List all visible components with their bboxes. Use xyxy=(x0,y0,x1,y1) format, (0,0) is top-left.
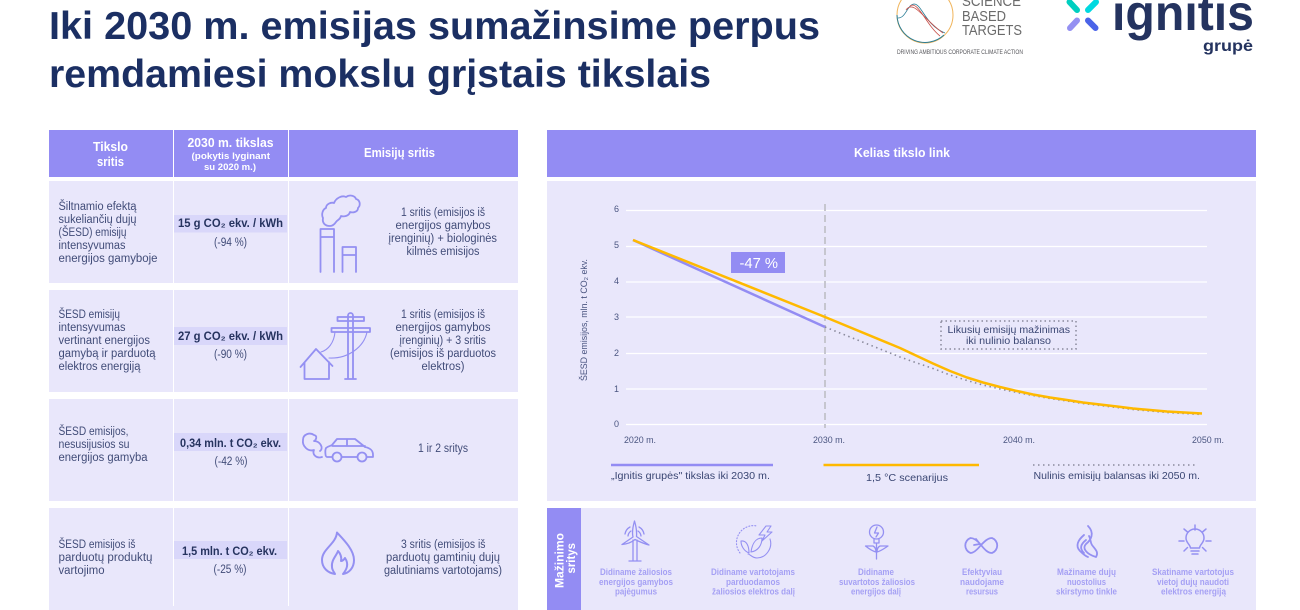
title xyxy=(49,5,820,96)
y axis labels xyxy=(614,204,619,429)
icon: gas flame xyxy=(322,532,354,574)
callout: residual emissions xyxy=(941,321,1076,349)
item: leaf and lightning: žaliosios elektros dalį xyxy=(712,586,795,596)
row 2: sold electricity intensity: energijos gamybos xyxy=(396,322,491,334)
tab: reduction areas heading: Mažinimo xyxy=(552,533,566,588)
callout: -47 percent xyxy=(731,252,785,273)
icon: car with exhaust xyxy=(303,434,373,462)
x axis labels: 2040 m. xyxy=(1003,435,1035,445)
y axis labels: 1 xyxy=(614,384,619,394)
row 1: energy generation intensity: kilmės emisijos xyxy=(406,246,480,258)
legend: „Ignitis grupės" tikslas iki 2030 m. xyxy=(611,470,770,482)
item: gas wave xyxy=(1056,526,1117,596)
logo: science based targets: TARGETS xyxy=(962,23,1022,39)
logo: ignitis grupe: grupė xyxy=(1203,38,1253,55)
logo: science based targets: BASED xyxy=(962,9,1006,25)
row 1: energy generation intensity: 15 g CO₂ ekv. / kWh xyxy=(178,218,283,230)
row 1: energy generation intensity: įrenginių) + biologinės xyxy=(388,233,497,245)
table header: su 2020 m.) xyxy=(204,162,256,173)
logo: science based targets xyxy=(897,0,1023,56)
row 2: sold electricity intensity: ŠESD emisijų xyxy=(58,308,120,321)
panel header: path to target: Kelias tikslo link xyxy=(854,146,950,160)
item: leaf and lightning xyxy=(711,526,795,596)
icon: factory chimneys xyxy=(320,196,360,272)
row 4: sold products use: vartojimo xyxy=(58,565,104,577)
item: light bulb: Skatiname vartotojus xyxy=(1152,567,1234,577)
row 4: sold products use: (-25 %) xyxy=(214,564,247,576)
tab: reduction areas heading: sritys xyxy=(564,543,578,574)
row 4: sold products use: ŠESD emisijos iš xyxy=(58,538,136,551)
item: infinity loop xyxy=(960,538,1004,596)
line: 1.5C scenario xyxy=(633,240,1202,414)
row 3: non-generation emissions: 0,34 mln. t CO₂ ekv. xyxy=(180,438,281,450)
y axis labels: 4 xyxy=(614,276,619,286)
row 1: energy generation intensity: Šiltnamio efektą xyxy=(58,200,137,213)
y axis labels: 6 xyxy=(614,204,619,214)
row 1: energy generation intensity xyxy=(49,181,518,283)
row 4: sold products use: 1,5 mln. t CO₂ ekv. xyxy=(182,546,277,558)
item: light bulb: elektros energiją xyxy=(1161,586,1226,596)
table header: (pokytis lyginant xyxy=(192,151,271,162)
item: bulb plant xyxy=(839,525,915,596)
item: infinity loop: resursus xyxy=(966,586,998,596)
item: gas wave: skirstymo tinkle xyxy=(1056,586,1117,596)
callout: residual emissions: Likusių emisijų mažinimas xyxy=(948,324,1070,336)
table header xyxy=(49,130,518,177)
item: wind turbine: energijos gamybos xyxy=(599,577,673,587)
row 3: non-generation emissions: (-42 %) xyxy=(214,456,248,468)
item: light bulb: vietoj dujų naudoti xyxy=(1157,577,1229,587)
2030 marker xyxy=(824,204,826,428)
y axis title: ŠESD emisijos, mln. t CO₂ ekv. xyxy=(579,259,589,381)
row 4: sold products use: galutiniams vartotojams) xyxy=(384,565,502,577)
y axis labels: 2 xyxy=(614,348,619,358)
y axis labels: 0 xyxy=(614,419,619,429)
item: leaf and lightning: Didiname vartotojams xyxy=(711,567,795,577)
row 3: non-generation emissions xyxy=(49,399,518,501)
row 2: sold electricity intensity: elektros energiją xyxy=(58,361,141,373)
item: wind turbine: pajėgumus xyxy=(615,586,657,596)
item: leaf and lightning: parduodamos xyxy=(726,577,780,587)
item: infinity loop: Efektyviau xyxy=(962,567,1002,577)
item: bulb plant: suvartotos žaliosios xyxy=(839,577,915,587)
item: bulb plant: Didiname xyxy=(858,567,894,577)
row 4: sold products use: parduotų produktų xyxy=(58,552,152,564)
row 1: energy generation intensity: energijos gamyboje xyxy=(58,253,158,265)
logo: ignitis grupe xyxy=(1070,0,1254,55)
item: wind turbine xyxy=(599,521,673,596)
row 2: sold electricity intensity: vertinant energijos xyxy=(58,335,150,347)
tab: reduction areas heading xyxy=(547,508,581,610)
table header: Tikslo xyxy=(93,140,128,154)
row 2: sold electricity intensity xyxy=(49,290,518,392)
row 1: energy generation intensity: sukeliančių dujų xyxy=(58,214,136,226)
row 3: non-generation emissions: energijos gamyba xyxy=(58,452,148,464)
icon: house and power pole xyxy=(300,313,370,379)
table header: 2030 m. tikslas xyxy=(188,136,274,150)
row 2: sold electricity intensity: gamybą ir parduotą xyxy=(58,348,156,360)
panel: emissions line chart xyxy=(547,181,1256,501)
row 1: energy generation intensity: (ŠESD) emisijų xyxy=(58,226,126,239)
row 2: sold electricity intensity: elektros) xyxy=(422,361,465,373)
row 1: energy generation intensity: (-94 %) xyxy=(214,237,247,249)
logo: science based targets: DRIVING AMBITIOUS CORPORATE CLIMATE ACTION xyxy=(897,49,1023,56)
x axis labels xyxy=(624,435,1224,445)
item: infinity loop: naudojame xyxy=(960,577,1004,587)
panel: reduction areas xyxy=(547,508,1256,610)
title: remdamiesi mokslu grįstais tikslais xyxy=(49,53,711,96)
x axis labels: 2020 m. xyxy=(624,435,656,445)
table header: Emisijų sritis xyxy=(364,146,435,160)
x axis labels: 2050 m. xyxy=(1192,435,1224,445)
row 3: non-generation emissions: nesusijusios su xyxy=(58,439,130,451)
row 4: sold products use xyxy=(49,508,518,610)
legend xyxy=(611,465,1200,484)
panel: target table xyxy=(49,130,518,610)
callout: -47 percent: -47 % xyxy=(740,255,778,272)
item: light bulb xyxy=(1152,525,1234,596)
row 1: energy generation intensity: 1 sritis (emisijos iš xyxy=(401,207,485,219)
legend: Nulinis emisijų balansas iki 2050 m. xyxy=(1034,470,1200,482)
line: net zero dotted xyxy=(825,327,1202,414)
row 3: non-generation emissions: 1 ir 2 sritys xyxy=(418,443,468,455)
legend: 1,5 °C scenarijus xyxy=(866,472,948,484)
row 4: sold products use: parduotų gamtinių dujų xyxy=(386,552,500,564)
row 4: sold products use: 3 sritis (emisijos iš xyxy=(401,539,486,551)
item: wind turbine: Didiname žaliosios xyxy=(600,567,672,577)
row 2: sold electricity intensity: (emisijos iš parduotos xyxy=(390,348,496,360)
row 2: sold electricity intensity: 1 sritis (emisijos iš xyxy=(401,309,485,321)
row 2: sold electricity intensity: (-90 %) xyxy=(214,349,247,361)
row 1: energy generation intensity: intensyvumas xyxy=(58,240,126,252)
line: ignitis target xyxy=(633,240,825,327)
y axis labels: 5 xyxy=(614,240,619,250)
y axis labels: 3 xyxy=(614,312,619,322)
table header: sritis xyxy=(97,155,124,169)
x axis labels: 2030 m. xyxy=(813,435,845,445)
row 1: energy generation intensity: energijos gamybos xyxy=(396,220,491,232)
item: gas wave: Mažiname dujų xyxy=(1057,567,1116,577)
item: gas wave: nuostolius xyxy=(1067,577,1106,587)
row 3: non-generation emissions: ŠESD emisijos, xyxy=(58,425,128,438)
callout: residual emissions: iki nulinio balanso xyxy=(966,335,1051,347)
panel header: path to target xyxy=(547,130,1256,177)
row 2: sold electricity intensity: 27 g CO₂ ekv. / kWh xyxy=(178,331,283,343)
row 2: sold electricity intensity: intensyvumas xyxy=(58,322,126,334)
title: Iki 2030 m. emisijas sumažinsime perpus xyxy=(49,5,820,48)
row 2: sold electricity intensity: įrenginių) + 3 sritis xyxy=(400,335,486,347)
item: bulb plant: energijos dalį xyxy=(851,586,901,596)
